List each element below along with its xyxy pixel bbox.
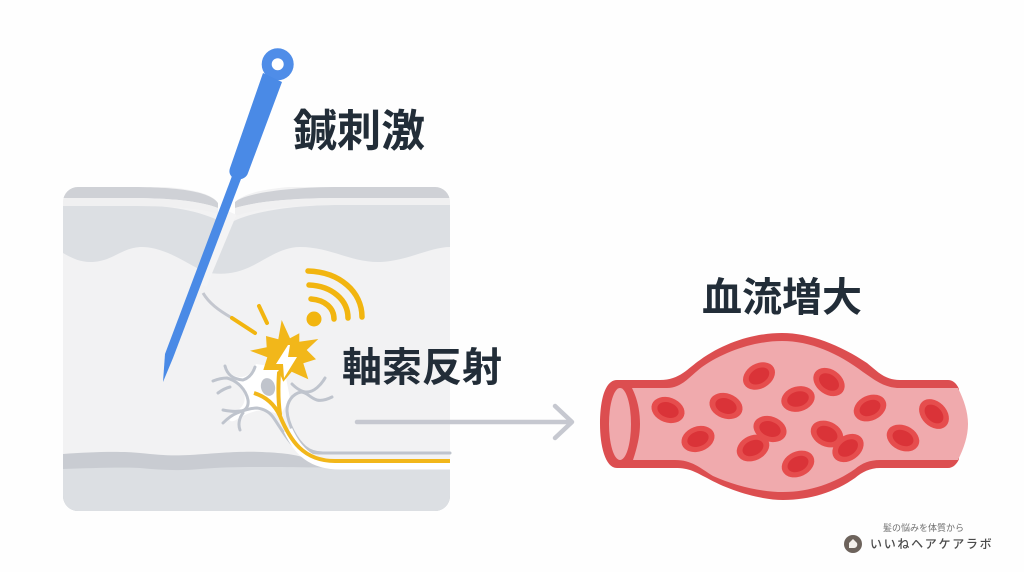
heading: increased blood flow: 血流増大 [702,276,862,320]
spark lines [232,306,267,333]
logo name: いいねヘアケアラボ [870,537,993,551]
red blood cells [648,357,955,483]
icon: starburst [250,320,318,382]
blood vessel [600,333,968,500]
logo tagline: 髪の悩みを体質から [883,522,964,533]
vessel opening [609,388,631,460]
needle insertion nerve line [203,293,232,318]
panel: skin cross-section [63,186,450,511]
heading: axon reflex: 軸索反射 [342,346,502,390]
arrow [357,406,572,438]
nerve neuron [213,364,450,465]
logo icon [844,535,862,553]
icon: signal waves [306,271,362,326]
acupuncture needle [163,48,294,382]
heading: needle stimulation: 鍼刺激 [293,107,425,156]
